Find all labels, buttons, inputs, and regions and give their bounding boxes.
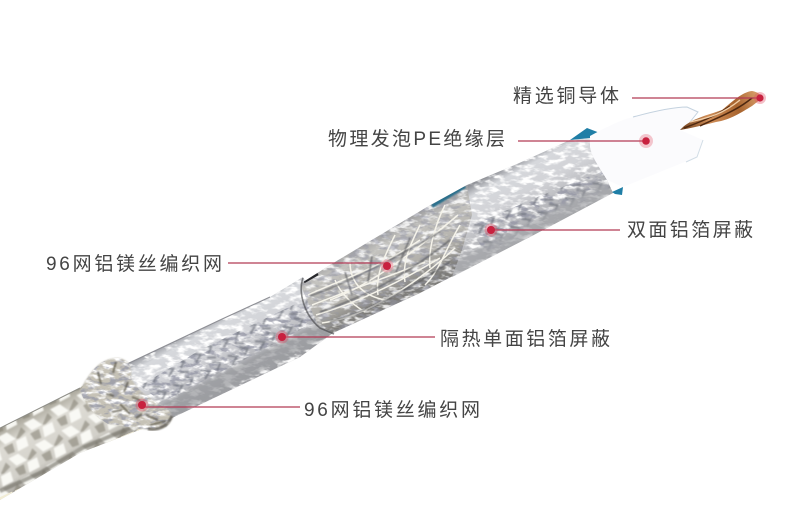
label: copper conductor: 精选铜导体 [513,85,619,107]
outer braid section [0,385,142,500]
blue inner layer edges [570,128,623,195]
label: inner braid [46,253,394,275]
double-sided foil section [452,138,613,277]
cable illustration [0,91,761,510]
cable structure infographic [0,86,766,500]
label: double-sided foil: 双面铝箔屏蔽 [627,219,753,241]
label: foam insulation [328,128,653,150]
label: outer braid [136,398,480,421]
label: copper conductor [513,85,766,107]
label: heat-insulating foil [276,328,610,350]
label: double-sided foil [484,219,753,241]
label: foam insulation: 物理发泡PE绝缘层 [328,128,505,150]
exposed inner braid section [300,185,472,335]
white foam insulation [590,107,703,187]
foil section: heat-insulating single side [128,277,333,418]
knot of folded-back braid [80,357,174,431]
label: inner braid: 96网铝镁丝编织网 [46,253,222,275]
copper conductor [680,91,761,130]
label: outer braid: 96网铝镁丝编织网 [304,399,480,421]
label: heat-insulating foil: 隔热单面铝箔屏蔽 [440,328,610,350]
